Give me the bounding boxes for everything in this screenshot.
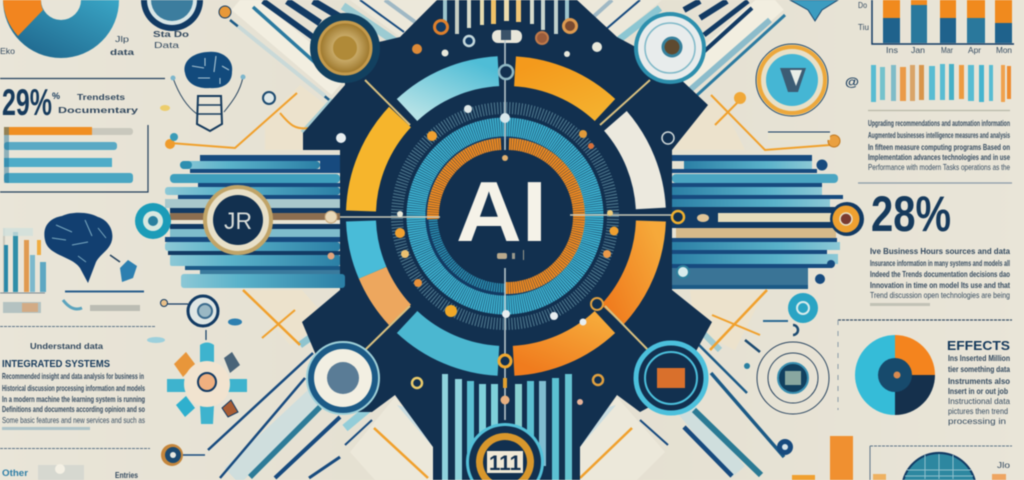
panel: top-left donut chart [0, 0, 134, 58]
text block: left article [0, 341, 150, 448]
text: top label [153, 29, 189, 50]
icon: brain world map [44, 213, 137, 283]
chart: top-right stacked bars: Mon [996, 45, 1012, 55]
text block: right upper article [858, 110, 1012, 183]
chart: top-right stacked bars: Tiu [858, 22, 869, 32]
panel: bottom-left footer items: Entries [115, 470, 138, 480]
text block: left article: Some basic features and new services and such as [2, 415, 145, 425]
chart: top-right stacked bars: Do [858, 0, 867, 10]
text block: pie legend: Ins Inserted Million [948, 353, 1010, 363]
icon: teal dot node [744, 293, 818, 369]
chart: small vertical bars [0, 228, 46, 293]
small orbit dots [336, 80, 674, 405]
text block: pie legend [947, 338, 1010, 426]
small label under AI [497, 250, 524, 260]
graphic: right horizontal stripes [672, 155, 843, 289]
icon: left tan node: JR [224, 208, 252, 235]
text block: left article: Definitions and documents according opinion and so [2, 404, 145, 414]
text: chart caption [0, 292, 155, 326]
chart: pie [855, 335, 935, 415]
segment: left yellow [361, 117, 400, 211]
panel: 29% statistic with progress bars: Trendsets [77, 92, 125, 102]
graphic: top-right diagonal stripes [680, 0, 785, 107]
panel: bottom-left footer items: Other [2, 468, 29, 478]
icon: top-right star mark [790, 0, 838, 21]
chart: top-right stacked bars: Ins [886, 45, 898, 55]
graphic: top-left diagonal stripes [230, 0, 340, 133]
chart: concentric tick rings [397, 108, 613, 324]
icon: lower-right pin [777, 439, 793, 455]
segment: left teal [361, 221, 373, 273]
top nodes [412, 20, 602, 57]
text block: right middle article: Ive Business Hours sources and data [870, 246, 1010, 256]
text block: left article: Historical discussion processing information and models [2, 383, 145, 393]
panel: tan backing shapes behind diagonals [245, 85, 765, 350]
panel: dark central body [302, 0, 712, 480]
stat: 28%: 28% [871, 186, 951, 242]
segment: top right orange [515, 71, 605, 110]
center label: AI [456, 165, 547, 260]
panel: 29% statistic with progress bars: 29% [2, 82, 52, 123]
segment: right lower orange [612, 221, 651, 315]
chart: barcode bars [845, 64, 1011, 102]
crosshair connectors with nodes [340, 40, 684, 420]
panel: top-left donut chart: data [110, 47, 134, 57]
icon: target rings [757, 342, 829, 414]
chart: central ring segments [361, 71, 651, 361]
chart: top-right stacked bars: Mar [941, 45, 953, 55]
icon: bottom centre node [466, 423, 544, 480]
graphic: bottom vertical stripes [442, 374, 572, 480]
text block: left article: Understand data [30, 341, 103, 351]
orange connector lines [170, 93, 830, 350]
text block: pie legend: processing in [948, 416, 1006, 426]
icon: left tan node [205, 187, 271, 253]
panel: lower cream wedges [345, 388, 668, 480]
graphic: left horizontal stripes [165, 155, 345, 288]
chart: barcode bars: @ [845, 75, 859, 89]
icon: orange pin right [734, 92, 840, 147]
segment: bottom left teal [407, 322, 498, 361]
icon: left teal node [135, 203, 171, 239]
icon: top badge [141, 0, 203, 31]
chart: top-right stacked bars: Jan [911, 45, 925, 55]
icon: top-right white node [634, 12, 706, 84]
text block: pie legend: Instruments also [948, 376, 1010, 386]
icon: top-left gold node [310, 13, 380, 83]
panel: 29% statistic with progress bars: Documentary [58, 105, 138, 115]
panel: top-left cream striped wedge [343, 0, 437, 42]
panel: top-left donut chart: Jlp [115, 34, 129, 44]
panel: 29% statistic with progress bars [0, 78, 165, 192]
icon: orange pins, top-left [165, 6, 275, 149]
chart: top-right stacked bars: Apr [968, 45, 981, 55]
icon: bottom-left node [307, 342, 379, 414]
text block: left article: INTEGRATED SYSTEMS [2, 359, 110, 370]
panel: bottom-left footer items [2, 464, 138, 480]
text block: pie legend: pictures then trend [948, 406, 1008, 416]
icon: bottom-left node pin [161, 444, 183, 466]
panel: top-left donut chart: Eko [0, 46, 15, 56]
icon: brain light bulb [160, 52, 246, 131]
graphic: bottom-left diagonal stripes [172, 320, 340, 478]
icon: gear [167, 330, 247, 424]
text: top label: Data [154, 40, 179, 50]
icon: bottom-right node [636, 343, 706, 413]
graphic: top vertical stripes [443, 0, 569, 34]
segment: right white [615, 121, 651, 208]
graphic: bottom-right diagonal stripes [670, 320, 784, 476]
chart: orange bars bottom [792, 436, 853, 480]
chart: top-right stacked bars [858, 0, 1014, 55]
ring: lower-left teal ticks [433, 219, 505, 288]
panel: top-right cream striped wedge [577, 0, 662, 42]
text block: left article: In a modern machine the learning system is running [2, 394, 145, 404]
text block: pie legend: Insert in or out job [948, 386, 1008, 396]
segment: bottom orange [514, 322, 605, 361]
segment: left peach [373, 273, 400, 315]
panel: 29% statistic with progress bars: % [52, 91, 60, 101]
text block: right middle article [838, 246, 1012, 410]
text block: pie legend: EFFECTS [947, 338, 1010, 353]
text block: left article: Recommended insight and data analysis for business in [2, 371, 144, 381]
segment: top left light blue [407, 71, 498, 110]
icon: bottom centre node: 111 [489, 452, 521, 475]
text block: pie legend: Instructional data [948, 396, 1010, 406]
chart: globe bottom right [870, 446, 1012, 480]
text: top label: Sta Do [153, 29, 189, 39]
chart: globe bottom right: Jlo [997, 460, 1010, 470]
ring: orange ticks [433, 144, 579, 288]
icon: left network node [147, 296, 242, 343]
icon: top-right teal badge [756, 44, 828, 116]
icon: right orange node [830, 202, 864, 236]
